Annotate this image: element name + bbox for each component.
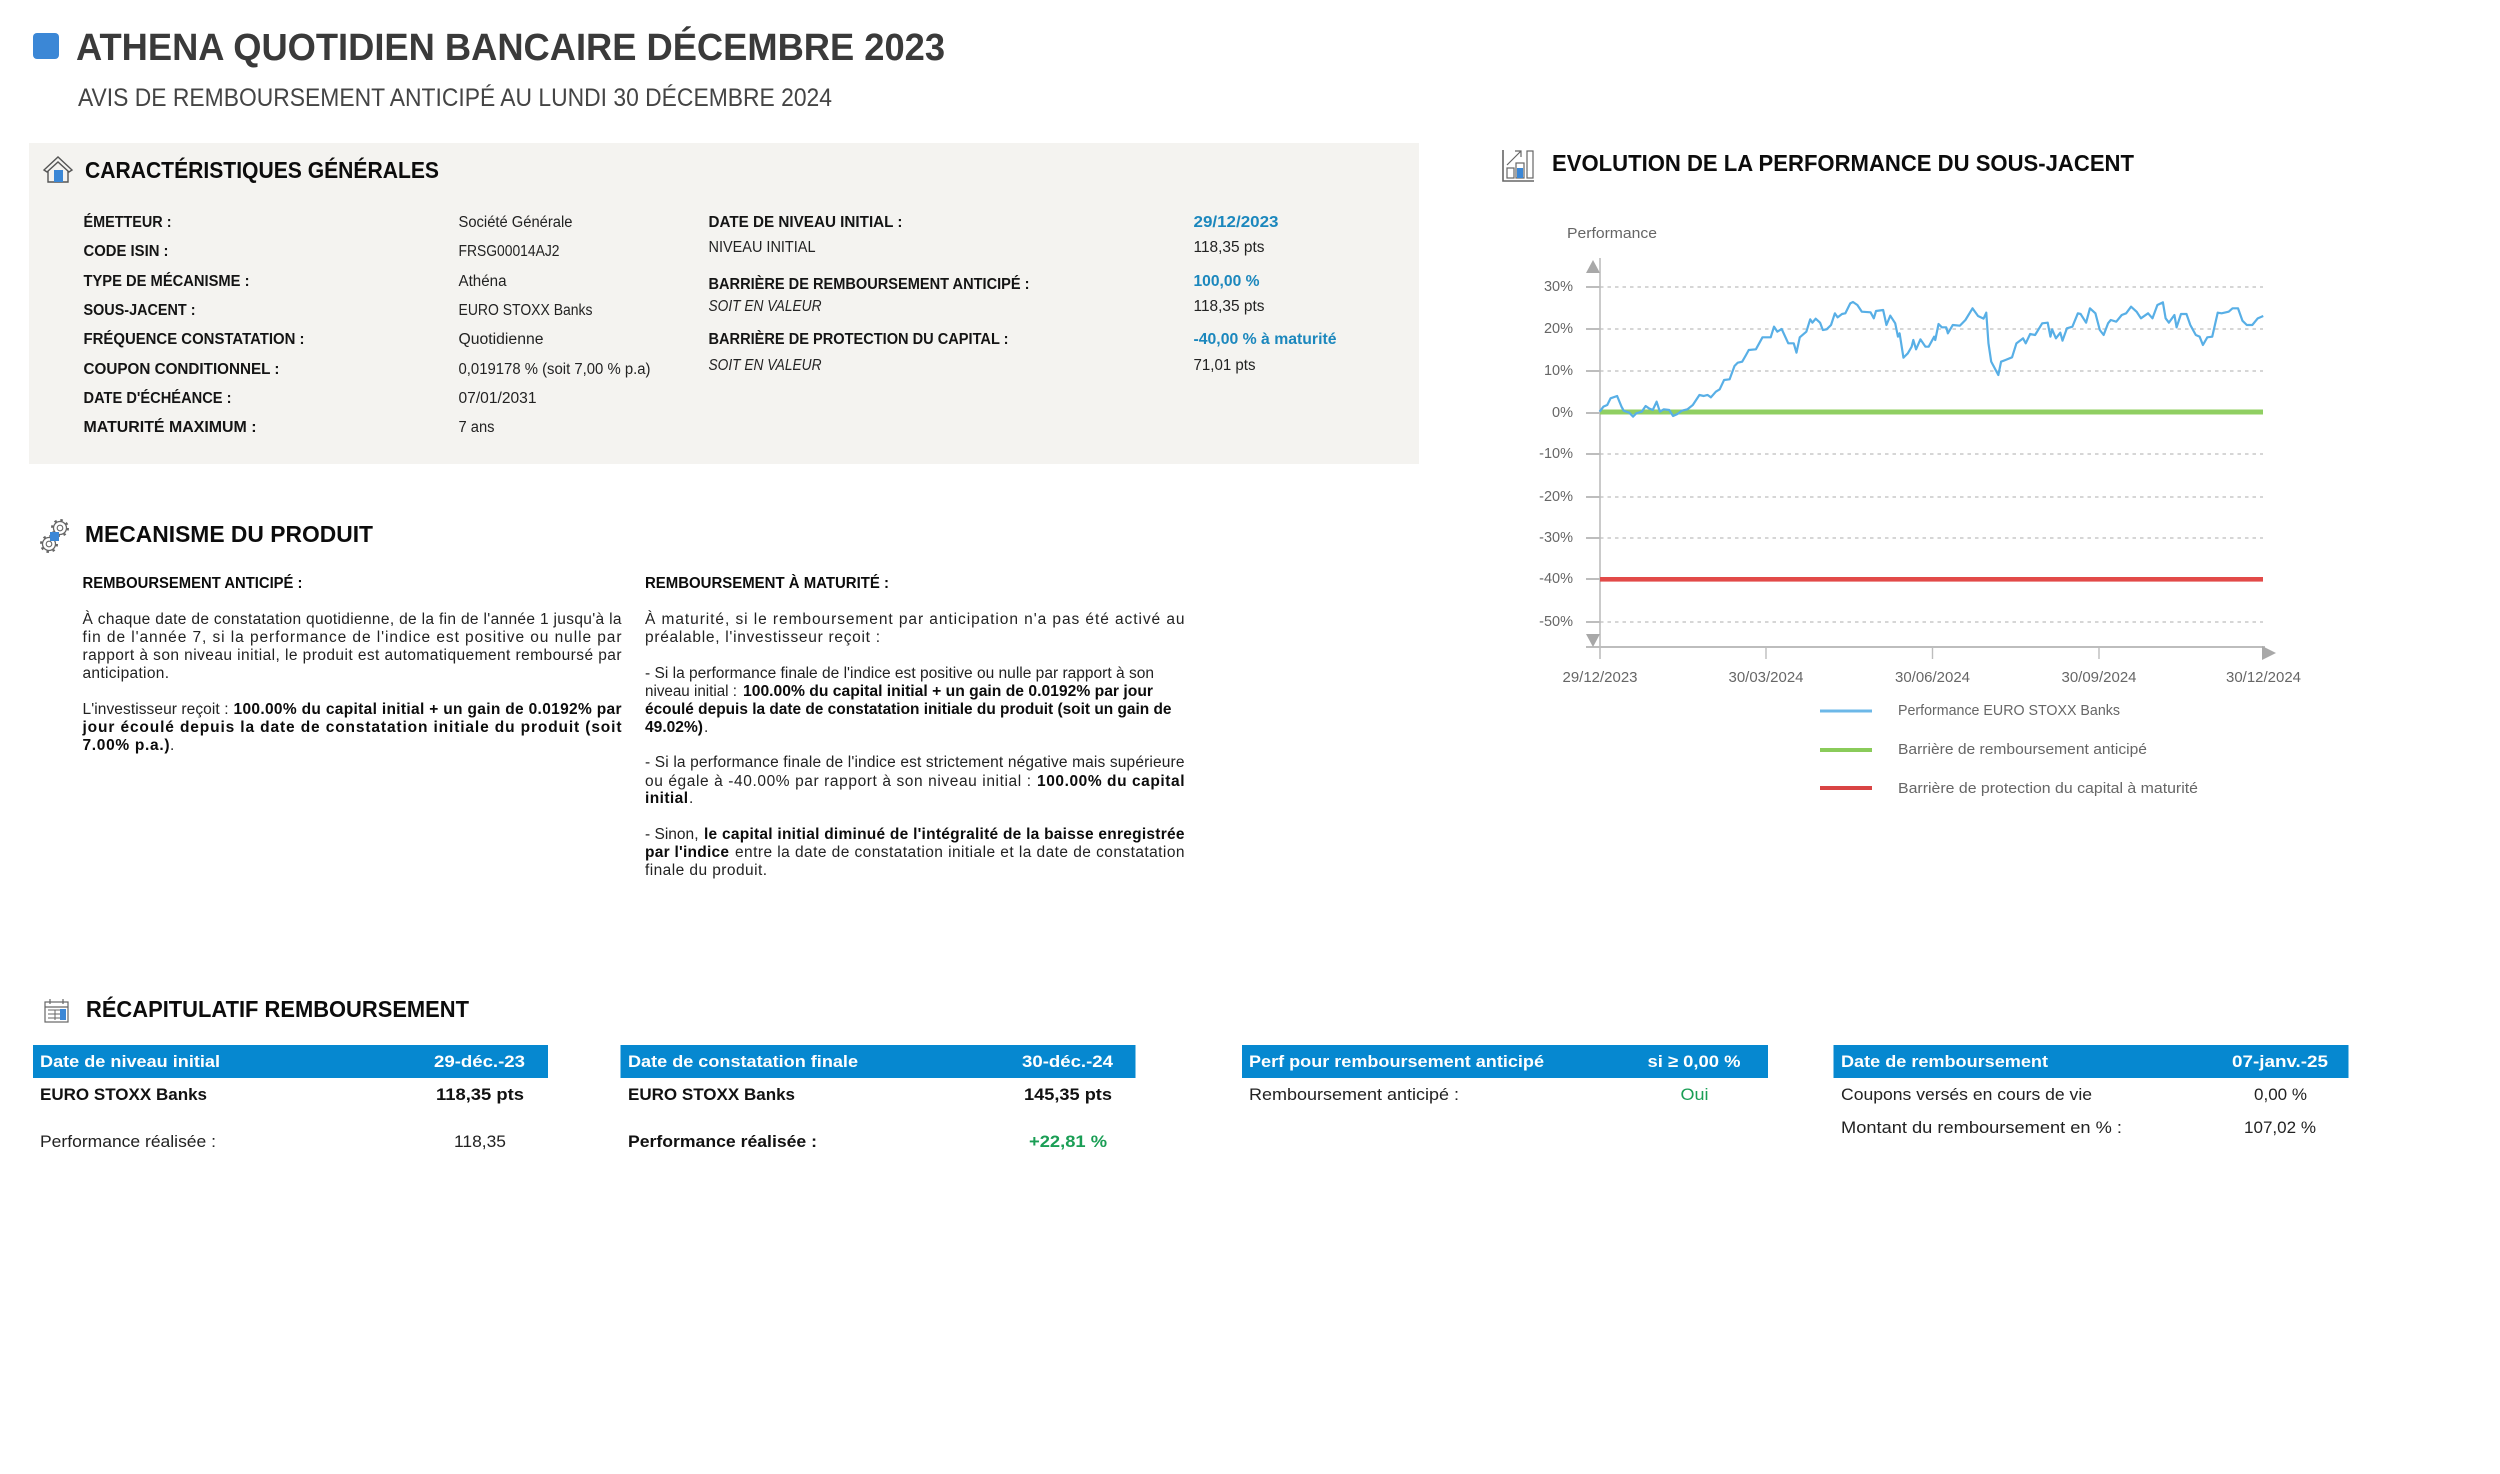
icon: house [44,157,72,182]
legend: Barrière de remboursement anticipé [1898,742,2147,758]
table: date de remboursement [1834,1045,2348,1137]
general characteristics left column [84,214,650,436]
general characteristics right column: -40,00 % à maturité [1194,331,1337,348]
general characteristics right column: 29/12/2023 [1194,214,1279,231]
table: niveau initial: 118,35 [454,1132,506,1151]
text block: remboursement à maturité: écoulé depuis la date de constatation initiale du produit (soit un gain de [645,701,1172,718]
text block: remboursement anticipé: 7.00% p.a.) [82,737,170,754]
general characteristics left column: ÉMETTEUR : [84,214,172,231]
table: remboursement anticipé [1242,1045,1768,1104]
table: niveau initial: EURO STOXX Banks [40,1085,207,1104]
table: niveau initial [33,1045,548,1151]
table: remboursement anticipé: Remboursement anticipé : [1249,1085,1459,1104]
text block: remboursement anticipé: jour écoulé depuis la date de constatation initiale du produit (soit [82,719,622,736]
text block: remboursement à maturité: initial [645,790,688,807]
text block: remboursement à maturité: finale du produit. [645,862,767,879]
table: remboursement anticipé: Oui [1680,1085,1708,1104]
general characteristics left column: CODE ISIN : [84,243,168,260]
y axis labels: 10% [1544,363,1573,379]
text block: remboursement anticipé [82,575,622,754]
general characteristics left column: 7 ans [458,419,495,436]
table: date de remboursement: 107,02 % [2244,1118,2316,1137]
performance line [1600,302,2263,417]
table: niveau initial: Performance réalisée : [40,1132,216,1151]
x axis labels: 30/09/2024 [2062,670,2136,686]
text block: remboursement anticipé: À chaque date de constatation quotidienne, de la fin de l'année 1 jusqu'à la [82,611,622,628]
text block: remboursement à maturité: À maturité, si le remboursement par anticipation n'a pas été activé au [645,611,1184,628]
panel: récapitulatif remboursement [33,995,2348,1151]
general characteristics left column: FRÉQUENCE CONSTATATION : [84,331,304,348]
text block: remboursement à maturité: - Si la performance finale de l'indice est strictement négative mais supérieure [645,754,1184,771]
y axis labels: 0% [1552,405,1573,421]
text block: remboursement à maturité: entre la date de constatation initiale et la date de constatation [735,844,1184,861]
text block: remboursement anticipé: REMBOURSEMENT ANTICIPÉ : [82,575,302,592]
general characteristics left column: Athéna [458,273,507,290]
green barrier line [1600,410,2263,414]
text block: remboursement à maturité: préalable, l'investisseur reçoit : [645,629,880,646]
table: date de remboursement: Coupons versés en cours de vie [1841,1085,2092,1104]
axis arrows [1586,260,2276,660]
general characteristics left column: SOUS-JACENT : [84,302,196,319]
text block: remboursement à maturité: 49.02%) [645,719,703,736]
panel: caractéristiques générales [29,143,1419,464]
legend [1820,703,2198,797]
general characteristics right column: DATE DE NIVEAU INITIAL : [708,214,902,231]
text block: remboursement anticipé: . [170,737,174,754]
general characteristics left column: EURO STOXX Banks [458,302,593,319]
icon: gears [41,520,68,552]
x axis labels: 29/12/2023 [1562,670,1638,686]
x axis labels: 30/06/2024 [1895,670,1970,686]
heading: mécanisme: MECANISME DU PRODUIT [85,521,373,547]
general characteristics right column: 100,00 % [1194,273,1260,290]
table: niveau initial: Date de niveau initial [40,1052,220,1071]
general characteristics right column: 118,35 pts [1194,298,1265,315]
text block: remboursement à maturité: ou égale à -40.00% par rapport à son niveau initial : [645,773,1031,790]
y axis labels: 30% [1544,279,1573,295]
y axis labels: -10% [1539,446,1573,462]
x axis labels: 30/03/2024 [1728,670,1804,686]
text block: remboursement à maturité: 100.00% du capital [1037,773,1184,790]
table: date de remboursement: Date de remboursement [1841,1052,2048,1071]
table: niveau initial: 118,35 pts [436,1085,524,1104]
general characteristics right column: 118,35 pts [1194,239,1265,256]
icon: bar chart with arrow [1503,150,1534,181]
text block: remboursement anticipé: fin de l'année 7, si la performance de l'indice est positive ou nulle par [82,629,622,646]
table: niveau initial: 29-déc.-23 [434,1052,525,1071]
table: date de remboursement: Montant du remboursement en % : [1841,1118,2122,1137]
x axis labels [1562,670,2301,686]
subtitle: AVIS DE REMBOURSEMENT ANTICIPÉ AU LUNDI 30 DÉCEMBRE 2024 [78,83,832,112]
y axis labels: -40% [1539,571,1573,587]
general characteristics right column: NIVEAU INITIAL [708,239,816,256]
table: remboursement anticipé: Perf pour remboursement anticipé [1249,1052,1544,1071]
general characteristics right column: SOIT EN VALEUR [708,298,822,315]
y axis labels: 20% [1544,321,1573,337]
general characteristics left column: 07/01/2031 [458,390,536,407]
general characteristics right column: SOIT EN VALEUR [708,357,822,374]
general characteristics left column: DATE D'ÉCHÉANCE : [84,390,232,407]
table: date de remboursement: 07-janv.-25 [2232,1052,2328,1071]
legend: Barrière de protection du capital à maturité [1898,781,2198,797]
table: date de remboursement: 0,00 % [2254,1085,2307,1104]
table: constatation finale: Date de constatation finale [628,1052,858,1071]
table: constatation finale: +22,81 % [1029,1132,1107,1151]
text block: remboursement à maturité: niveau initial : [645,683,737,700]
text block: remboursement anticipé: anticipation. [82,665,169,682]
general characteristics right column: 71,01 pts [1194,357,1256,374]
panel: évolution de la performance [1503,150,2301,797]
general characteristics left column: Quotidienne [458,331,544,348]
y axis labels: -30% [1539,530,1573,546]
text block: remboursement à maturité: . [689,790,693,807]
panel: mécanisme du produit [41,520,1185,879]
heading: évolution: EVOLUTION DE LA PERFORMANCE DU SOUS-JACENT [1552,150,2134,176]
table: constatation finale: Performance réalisée : [628,1132,817,1151]
text block: remboursement à maturité: - Sinon, [645,826,698,843]
x axis labels: 30/12/2024 [2226,670,2301,686]
title: ATHENA QUOTIDIEN BANCAIRE DÉCEMBRE 2023 [76,25,945,69]
red barrier line [1600,577,2263,582]
text block: remboursement à maturité: . [704,719,708,736]
text block: remboursement à maturité: - Si la performance finale de l'indice est positive ou nulle par rapport à son [645,665,1154,682]
heading: caractéristiques: CARACTÉRISTIQUES GÉNÉRALES [85,156,439,183]
general characteristics right column: BARRIÈRE DE PROTECTION DU CAPITAL : [708,331,1008,348]
y axis title: Performance [1567,226,1657,242]
line chart [1539,226,2301,797]
table: constatation finale [620,1045,1136,1151]
text block: remboursement anticipé: 100.00% du capital initial + un gain de 0.0192% par [234,701,622,718]
general characteristics right column: BARRIÈRE DE REMBOURSEMENT ANTICIPÉ : [708,276,1030,293]
y axis labels [1539,279,1573,630]
icon: title square [33,33,59,59]
table: constatation finale: EURO STOXX Banks [628,1085,795,1104]
text block: remboursement anticipé: L'investisseur reçoit : [82,701,228,718]
y axis labels: -20% [1539,489,1573,505]
text block: remboursement à maturité [645,575,1185,879]
general characteristics left column: FRSG00014AJ2 [458,243,560,260]
general characteristics left column: Société Générale [458,214,572,231]
text block: remboursement à maturité: 100.00% du capital initial + un gain de 0.0192% par jour [743,683,1153,700]
y axis labels: -50% [1539,614,1573,630]
legend: Performance EURO STOXX Banks [1898,703,2120,719]
table: constatation finale: 30-déc.-24 [1022,1052,1114,1071]
text block: remboursement à maturité: REMBOURSEMENT À MATURITÉ : [645,575,889,592]
text block: remboursement anticipé: rapport à son niveau initial, le produit est automatiquement remboursé par [82,647,622,664]
table: constatation finale: 145,35 pts [1024,1085,1112,1104]
icon: calendar [45,999,68,1022]
general characteristics left column: COUPON CONDITIONNEL : [84,361,280,378]
general characteristics right column [708,214,1337,374]
text block: remboursement à maturité: le capital initial diminué de l'intégralité de la baisse enregistrée [704,826,1185,843]
general characteristics left column: MATURITÉ MAXIMUM : [84,419,256,436]
heading: récapitulatif: RÉCAPITULATIF REMBOURSEMENT [86,995,469,1022]
table: remboursement anticipé: si ≥ 0,00 % [1648,1052,1740,1071]
general characteristics left column: 0,019178 % (soit 7,00 % p.a) [458,361,650,378]
general characteristics left column: TYPE DE MÉCANISME : [84,273,250,290]
text block: remboursement à maturité: par l'indice [645,844,729,861]
